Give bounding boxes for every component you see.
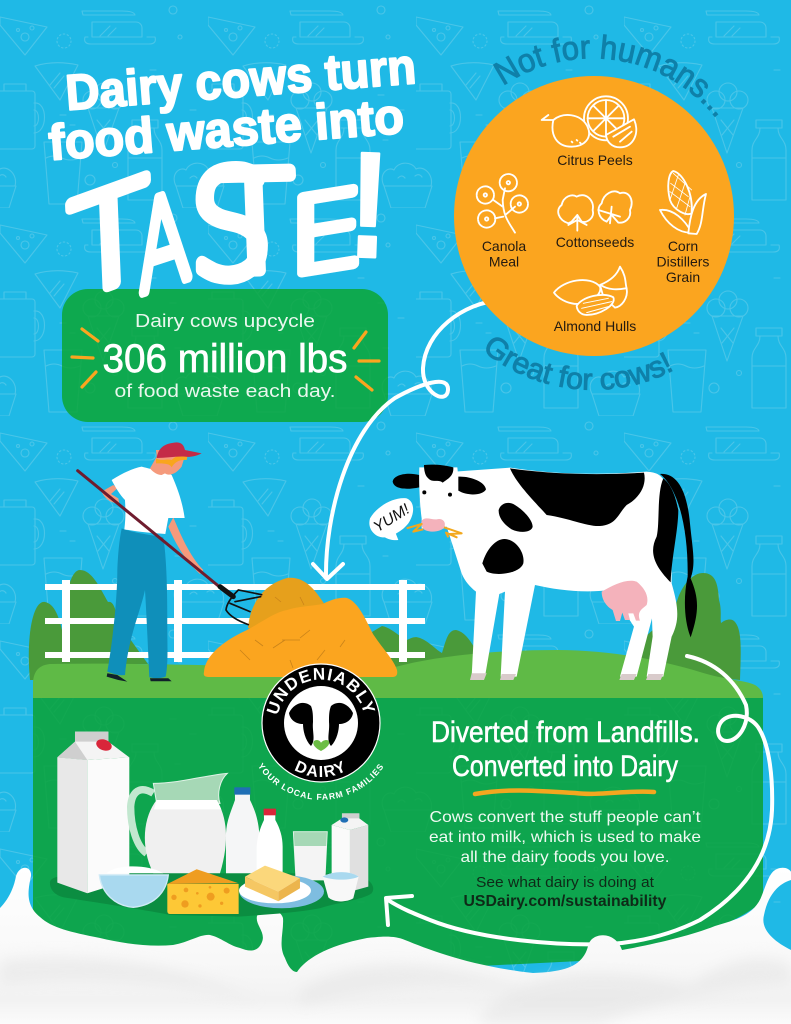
logo text: Undeniably: UNDENIABLY xyxy=(266,668,376,714)
cow neck patch xyxy=(499,503,533,532)
title: TASTE!: T xyxy=(212,144,298,304)
panel: dark green ground block xyxy=(33,697,763,975)
label: canola meal: Meal xyxy=(489,254,519,270)
cow hip patch xyxy=(653,478,678,582)
label: citrus peels: Citrus Peels xyxy=(557,152,633,168)
label: corn distillers grain: Corn xyxy=(668,238,698,254)
body text: all the dairy foods you love. xyxy=(460,849,670,866)
icon: almond xyxy=(554,267,627,315)
bushes behind the fence xyxy=(29,570,741,680)
cow saddle patch xyxy=(510,468,645,526)
pitchfork xyxy=(78,471,262,625)
speech bubble: YUM: YUM! xyxy=(370,500,413,536)
burst dashes xyxy=(72,329,379,390)
farmer with pitchfork xyxy=(78,442,262,682)
title: TASTE!: T xyxy=(67,149,153,330)
farmer shoes xyxy=(107,673,172,682)
body text: eat into milk, which is used to make xyxy=(429,829,701,846)
cow udder xyxy=(602,581,647,621)
heading: Diverted from Landfills xyxy=(431,716,700,783)
cheese wedge xyxy=(167,869,239,914)
curved label: Not for humans: Not for humans... xyxy=(492,34,718,118)
title: Dairy cows turn food waste into xyxy=(47,38,418,171)
farmer hair xyxy=(156,454,188,467)
arrow: loop from circle down to hay xyxy=(313,300,501,579)
orange squiggle underline xyxy=(475,790,654,794)
yogurt cup xyxy=(323,872,359,901)
icon: cotton xyxy=(558,191,632,231)
dairy foods still life xyxy=(50,732,373,917)
cow muzzle xyxy=(421,518,445,532)
plate xyxy=(239,875,324,908)
cow ears xyxy=(393,474,486,494)
logo text: Dairy: DAIRY xyxy=(294,760,343,777)
cow eyes xyxy=(422,490,452,497)
title: TASTE! xyxy=(67,120,392,330)
logo: Undeniably Dairy badge xyxy=(259,663,383,800)
milk splash xyxy=(0,868,791,1024)
cow xyxy=(369,465,697,680)
hay pile xyxy=(204,578,397,677)
stat number: 306 million lbs xyxy=(102,337,348,381)
title: TASTE!: ! xyxy=(346,120,392,289)
cow body xyxy=(420,468,677,677)
logo heart nose xyxy=(313,740,329,751)
farmer right arm xyxy=(168,517,203,574)
arrow: loop from cow down around to dairy foods xyxy=(386,656,772,944)
cow tail xyxy=(660,474,697,637)
title: TASTE!: S xyxy=(190,139,273,313)
heading: Diverted from Landfills: Diverted from Landfills. xyxy=(431,716,700,749)
stat intro text: Dairy cows upcycle xyxy=(135,311,315,331)
call to action xyxy=(464,874,667,910)
farmer left arm xyxy=(102,485,119,504)
title: TASTE!: A xyxy=(133,165,193,321)
milk shadows xyxy=(0,957,791,1024)
logo tagline: YOUR LOCAL FARM FAMILIES xyxy=(259,762,383,800)
icon: canola xyxy=(477,174,528,233)
glass of milk xyxy=(293,832,327,880)
logo cow face xyxy=(289,703,353,746)
cow head patch xyxy=(424,465,453,483)
large milk carton xyxy=(57,732,129,893)
glass pitcher xyxy=(131,773,227,873)
cow head xyxy=(419,467,458,528)
stat outro text: of food waste each day. xyxy=(114,381,336,401)
grass hill xyxy=(33,650,763,698)
body text: Cows convert the stuff people can’t xyxy=(430,809,701,826)
circle: orange not-for-humans feed panel xyxy=(454,76,734,356)
table shadow xyxy=(50,873,373,917)
farmer t-shirt xyxy=(112,467,185,534)
label: corn distillers grain: Distillers xyxy=(657,254,709,270)
hay in mouth xyxy=(407,524,462,537)
heading: Diverted from Landfills: Converted into Dairy xyxy=(452,750,678,783)
farmer neck and face xyxy=(150,450,187,475)
icon: citrus xyxy=(542,96,636,147)
cow shoulder patch xyxy=(482,539,524,574)
farmer hat xyxy=(157,442,202,458)
farmer jeans xyxy=(107,528,168,678)
icon: corn xyxy=(660,171,706,234)
label: cottonseeds: Cottonseeds xyxy=(556,234,634,250)
cow hooves xyxy=(470,673,663,680)
body text xyxy=(429,809,701,866)
small carton xyxy=(332,813,368,892)
call to action: USDairy.com/sustainability xyxy=(464,893,667,910)
milk bottle blue cap xyxy=(226,787,259,873)
butter xyxy=(245,866,300,901)
label: almond hulls: Almond Hulls xyxy=(554,318,636,334)
fence xyxy=(45,580,425,662)
title: Dairy cows turn food waste into: Dairy cows turn xyxy=(64,38,418,121)
panel: 306 million lbs stat xyxy=(62,289,388,422)
curved label: Great for cows: Great for cows! xyxy=(486,337,672,390)
bowl of cottage cheese xyxy=(99,866,168,907)
label: corn distillers grain: Grain xyxy=(666,269,700,285)
title: Dairy cows turn food waste into: food waste into xyxy=(47,88,406,171)
milk bottle red cap xyxy=(257,809,283,877)
label: canola meal: Canola xyxy=(482,238,526,254)
title: TASTE!: E xyxy=(288,167,364,300)
call to action: See what dairy is doing at xyxy=(476,874,655,891)
